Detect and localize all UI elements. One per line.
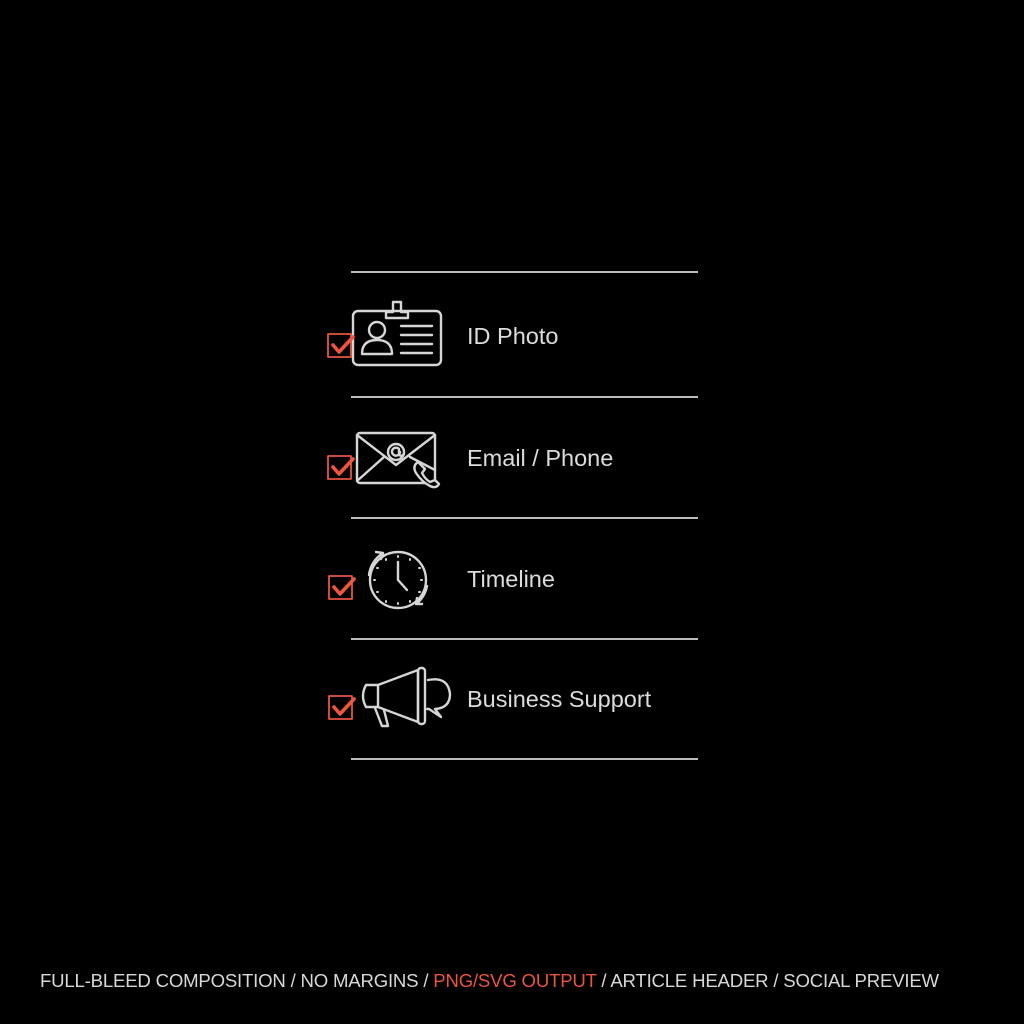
icon: megaphone [363,668,450,726]
label: Business Support: Business Support [467,686,651,712]
label: Email / Phone: Email / Phone [467,445,613,471]
icon: envelope with phone [357,433,439,487]
footer caption: FULL-BLEED COMPOSITION / NO MARGINS / PNG/SVG OUTPUT / ARTICLE HEADER / SOCIAL PREVIEW [40,970,939,991]
icon: clock [369,552,427,608]
label: ID Photo: ID Photo [467,323,558,349]
checkboxes [328,334,352,719]
icon: ID card [353,302,441,365]
label: Timeline: Timeline [467,566,555,592]
